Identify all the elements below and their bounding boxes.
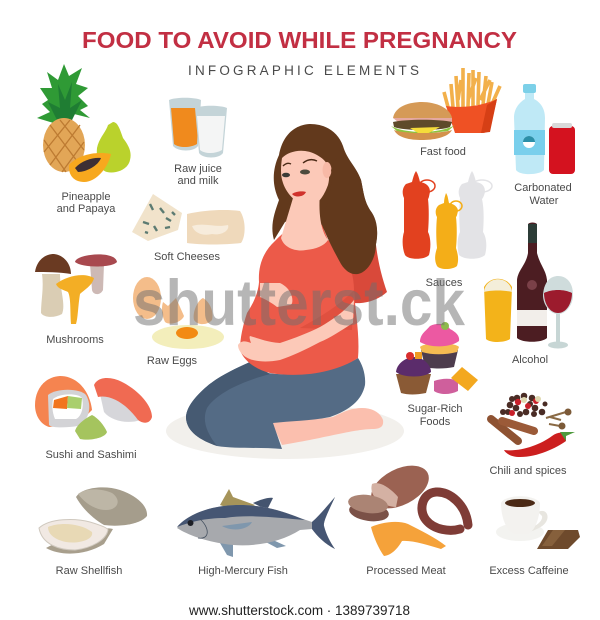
label: Processed Meat — [366, 565, 446, 577]
stock watermark: shutterst.ck — [133, 266, 466, 339]
label: Soft Cheeses — [154, 251, 221, 263]
foot — [272, 408, 383, 445]
label: Alcohol — [512, 354, 548, 366]
label: Water — [530, 195, 559, 207]
icon: burger and fries — [391, 68, 500, 140]
label: and Papaya — [57, 203, 116, 215]
icon: raw shellfish — [39, 487, 147, 554]
label: and milk — [178, 175, 219, 187]
illustration: pregnant woman kneeling — [166, 124, 404, 459]
icon: high-mercury fish (tuna) — [177, 489, 335, 557]
subtitle: INFOGRAPHIC ELEMENTS — [188, 63, 419, 78]
floor shadow — [166, 403, 404, 459]
icon: sauce bottles — [403, 171, 492, 269]
cloves — [546, 412, 566, 426]
label: Raw Eggs — [147, 355, 198, 367]
chocolate cupcake — [396, 374, 431, 394]
label: Raw juice — [174, 163, 222, 175]
upper arm and hand — [260, 283, 292, 307]
yellow bottle — [435, 193, 458, 269]
icon: pineapple and papaya — [37, 64, 131, 182]
candies — [434, 379, 458, 394]
footer stock id: www.shutterstock.com · 1389739718 — [188, 603, 410, 618]
label: Sugar-Rich — [407, 403, 463, 415]
shirt — [240, 216, 358, 375]
belly shade — [300, 290, 354, 330]
bun and fillings — [393, 102, 452, 120]
eyes and brows — [282, 160, 317, 177]
label: Excess Caffeine — [489, 565, 569, 577]
chili — [504, 433, 566, 457]
red bottle — [403, 171, 430, 259]
pineapple body — [43, 118, 85, 172]
label: Fast food — [420, 146, 466, 158]
icon: mushrooms — [35, 254, 117, 324]
ear — [322, 162, 332, 178]
sleeve — [350, 245, 387, 303]
lips — [292, 191, 306, 196]
label: Raw Shellfish — [56, 565, 122, 577]
label: Sushi and Sashimi — [45, 449, 137, 461]
icon: beer, wine bottle and glass — [484, 222, 573, 348]
label: Chili and spices — [489, 465, 567, 477]
trousers shadow — [186, 362, 270, 446]
nigiri — [100, 394, 140, 422]
trousers — [186, 358, 365, 449]
pink cupcake — [421, 350, 458, 368]
label: Pineapple — [62, 191, 110, 203]
icon: sushi and sashimi — [35, 376, 152, 440]
label: Sauces — [426, 277, 463, 289]
crown — [37, 64, 90, 126]
icon: coffee cup and chocolate — [496, 496, 580, 549]
right lock of hair — [322, 150, 377, 274]
label: Foods — [420, 416, 451, 428]
lower arm and hand — [238, 300, 354, 362]
fries — [444, 68, 500, 107]
pear-like fruit — [97, 122, 131, 172]
icon: processed meat — [347, 457, 468, 556]
title: FOOD TO AVOID WHILE PREGNANCY — [82, 27, 517, 53]
hair back — [272, 124, 377, 250]
peppercorns — [500, 393, 548, 417]
label: High-Mercury Fish — [198, 565, 288, 577]
neck and chest — [281, 192, 328, 250]
icon: soft cheeses — [132, 194, 245, 244]
icon: juice and milk glasses — [169, 98, 227, 158]
wasabi — [75, 415, 107, 440]
icon: raw eggs — [133, 277, 224, 349]
white bottle — [458, 171, 486, 259]
icon: sugar-rich foods — [396, 322, 478, 394]
label: Mushrooms — [46, 334, 104, 346]
icon: chili and spices — [491, 393, 575, 457]
papaya half — [69, 153, 111, 182]
label: Carbonated — [514, 182, 572, 194]
fries box — [446, 99, 497, 133]
cinnamon sticks — [491, 419, 518, 441]
icon: water bottle and soda can — [514, 84, 575, 174]
face — [281, 151, 329, 207]
